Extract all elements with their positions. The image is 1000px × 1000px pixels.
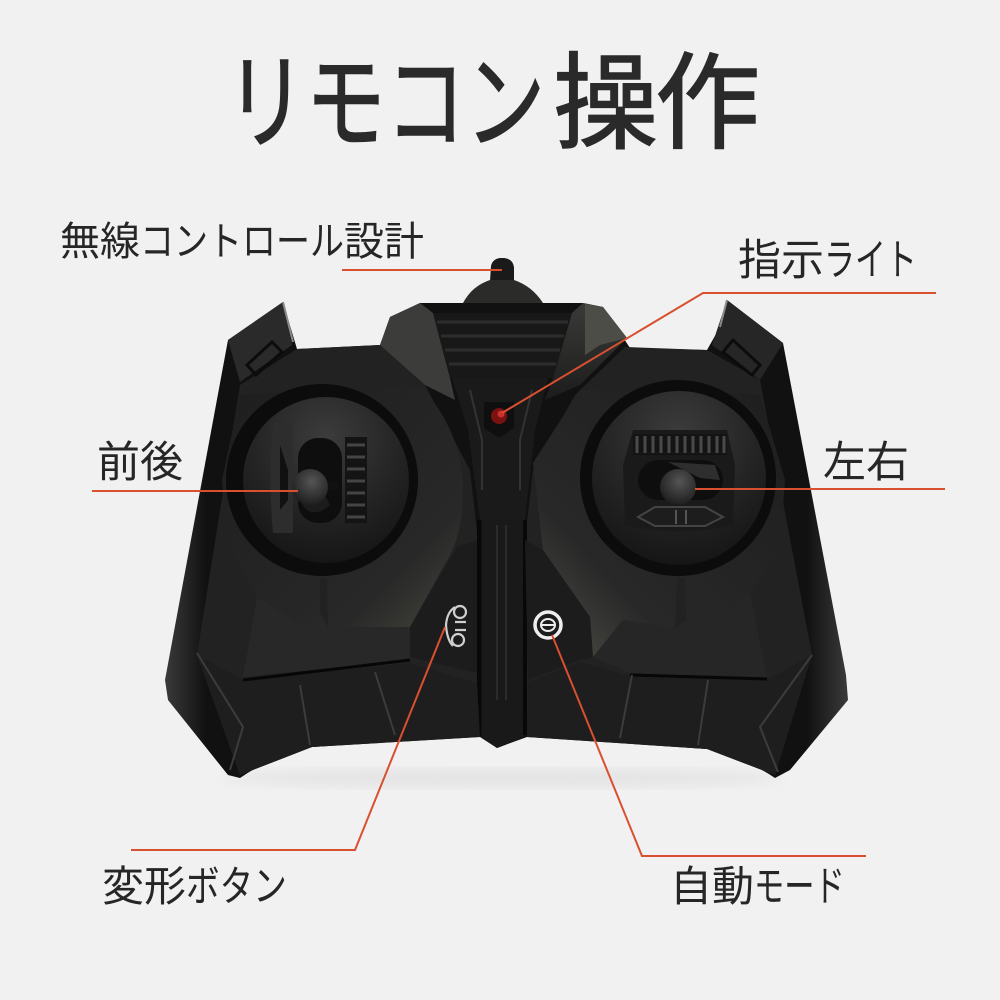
label: wireless design: 無線 設計 — [60, 220, 424, 264]
center column — [482, 520, 523, 748]
left button panel — [410, 540, 477, 673]
label: transform button: ボタン — [186, 863, 287, 910]
left stick dial — [226, 384, 418, 576]
title: リモコン — [226, 46, 545, 163]
label: transform button — [102, 863, 287, 910]
left ring band — [222, 385, 463, 627]
transform button icon — [446, 606, 466, 646]
controller body — [165, 300, 848, 778]
label: auto mode: モード — [754, 863, 845, 910]
antenna — [463, 258, 543, 303]
label: indicator light — [738, 237, 917, 285]
label: transform button: 変形 — [102, 863, 186, 910]
indicator light — [484, 402, 514, 438]
title: 操作 — [553, 46, 757, 163]
label: indicator light: ライト — [824, 237, 917, 285]
label: forward and back: 前後 — [97, 439, 183, 487]
center top — [380, 303, 455, 400]
label: wireless design: コントロール — [140, 220, 344, 264]
left face — [197, 345, 478, 775]
lower panels — [243, 597, 410, 677]
right stick dial — [580, 380, 776, 576]
title — [226, 46, 757, 163]
label: indicator light: 指示 — [738, 237, 824, 285]
right button panel — [525, 540, 593, 680]
leader lines — [92, 270, 945, 856]
auto mode button icon — [535, 612, 561, 638]
label: auto mode — [670, 863, 845, 910]
right face — [525, 347, 812, 775]
label: left and right: 左右 — [823, 439, 909, 487]
shoulder spikes — [228, 302, 292, 382]
label: auto mode: 自動 — [670, 863, 754, 910]
right ring band — [533, 390, 785, 657]
